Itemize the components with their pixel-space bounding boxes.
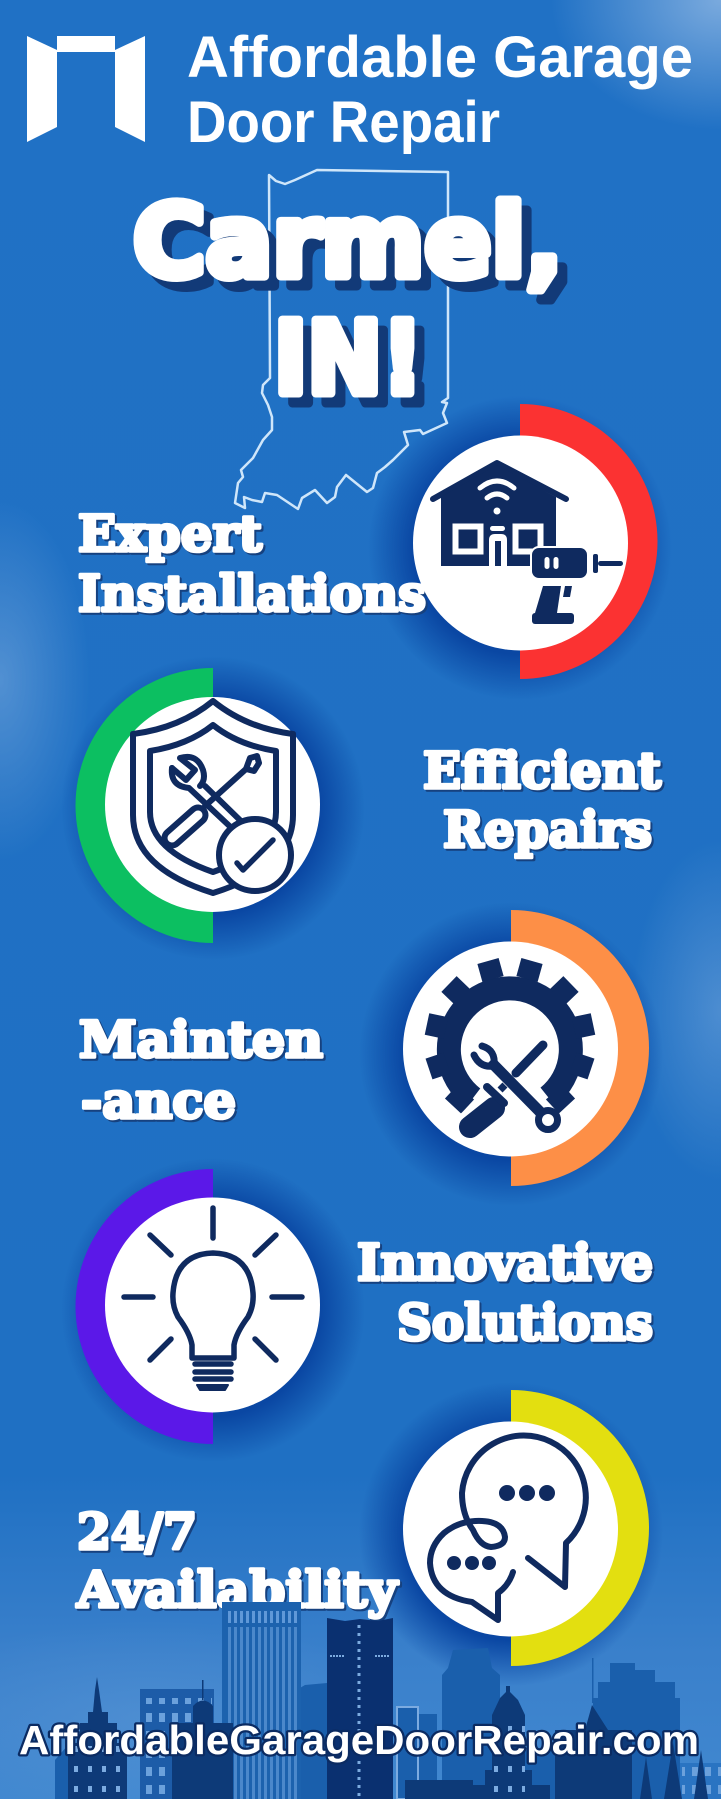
label: Efficient Repairs [423,741,661,859]
label: Efficient Repairs: Efficient [423,741,661,800]
logo mark [27,36,145,142]
icon: smart home with drill [433,463,623,624]
panel: installation circle [413,404,658,679]
label: Expert Installations [78,504,426,623]
label: Innovative Solutions [357,1233,653,1352]
company name [187,25,693,155]
striped tower [222,1602,301,1799]
label: Maintenance [79,1010,323,1130]
panel: maintenance circle [403,910,649,1186]
label: Expert Installations: Expert [78,504,262,563]
label: Maintenance: -ance [81,1071,236,1130]
company name: Affordable Garage [187,25,693,90]
panel: innovation circle [75,1169,320,1444]
windowed building [140,1689,214,1799]
label: 24/7 Availability: 24/7 [77,1502,197,1561]
icon: chat bubbles [430,1436,586,1620]
icon: shield with tools and check [133,701,293,893]
dark foreground towers [172,1700,233,1799]
title [133,183,563,417]
label: Expert Installations: Installations [78,564,426,623]
circle shadows [61,396,672,1686]
small light towers [397,1707,418,1799]
label: Innovative Solutions: Solutions [397,1293,653,1352]
label: Efficient Repairs: Repairs [443,800,652,859]
mid-tone background buildings [55,1648,680,1799]
title: IN! [274,300,423,417]
panel: availability circle [403,1390,649,1666]
label: 24/7 Availability [76,1502,399,1619]
label: Maintenance: Mainten [79,1010,323,1069]
icon: light bulb [124,1208,302,1390]
Indiana state outline [235,170,448,509]
website footer: AffordableGarageDoorRepair.com [19,1717,699,1763]
panel: repairs circle [75,668,320,943]
company name: Door Repair [187,90,500,155]
label: 24/7 Availability: Availability [76,1560,399,1619]
title: Carmel, [133,183,563,300]
city skyline [55,1602,721,1799]
icon: gear with tools [427,961,593,1130]
label: Innovative Solutions: Innovative [357,1233,653,1292]
